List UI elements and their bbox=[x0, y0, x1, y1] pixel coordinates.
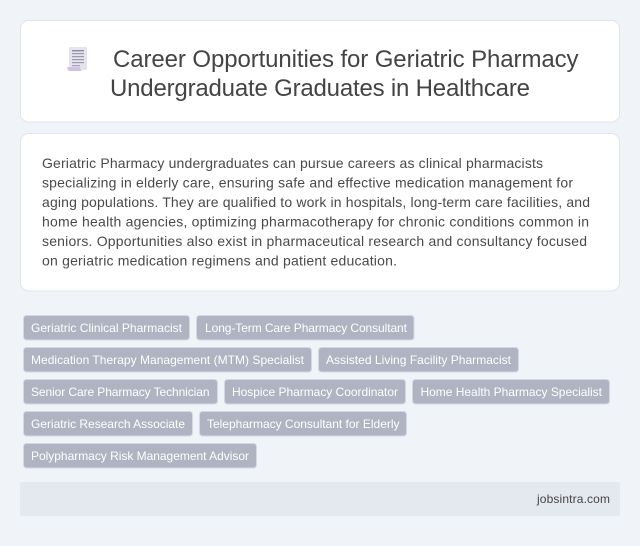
icon: document scroll bbox=[67, 47, 87, 71]
tag: Geriatric Clinical Pharmacist: Geriatric Clinical Pharmacist bbox=[31, 321, 183, 335]
footer source text: jobsintra.com bbox=[536, 492, 610, 506]
tag: Telepharmacy Consultant for Elderly bbox=[200, 412, 406, 436]
tag: Long-Term Care Pharmacy Consultant bbox=[196, 316, 414, 340]
tag: Hospice Pharmacy Coordinator bbox=[224, 380, 406, 404]
panel: description card bbox=[20, 134, 620, 291]
panel: header card bbox=[20, 20, 620, 122]
tag: Medication Therapy Management (MTM) Specialist: Medication Therapy Management (MTM) Specialist bbox=[31, 353, 305, 367]
tag: Telepharmacy Consultant for Elderly: Telepharmacy Consultant for Elderly bbox=[207, 417, 400, 431]
description text bbox=[42, 155, 590, 268]
panel: job role tags bbox=[24, 316, 610, 468]
tag: Home Health Pharmacy Specialist bbox=[412, 380, 610, 404]
description text: home health agencies, optimizing pharmacotherapy for chronic conditions common in bbox=[42, 214, 589, 230]
footer bar bbox=[20, 482, 620, 516]
title bbox=[110, 46, 578, 102]
tag: Geriatric Research Associate: Geriatric Research Associate bbox=[31, 417, 185, 431]
tag: Medication Therapy Management (MTM) Specialist bbox=[24, 348, 312, 372]
description text: Geriatric Pharmacy undergraduates can pursue careers as clinical pharmacists bbox=[42, 155, 543, 171]
tag: Senior Care Pharmacy Technician bbox=[24, 380, 218, 404]
tag: Senior Care Pharmacy Technician: Senior Care Pharmacy Technician bbox=[31, 385, 210, 399]
title: Undergraduate Graduates in Healthcare bbox=[110, 75, 530, 102]
tag: Assisted Living Facility Pharmacist bbox=[318, 348, 518, 372]
title: Career Opportunities for Geriatric Pharmacy bbox=[113, 46, 578, 73]
tag: Geriatric Research Associate bbox=[24, 412, 192, 436]
tag: Geriatric Clinical Pharmacist bbox=[24, 316, 190, 340]
description text: on geriatric medication regimens and patient education. bbox=[42, 252, 397, 268]
tag: Long-Term Care Pharmacy Consultant: Long-Term Care Pharmacy Consultant bbox=[205, 321, 408, 335]
tag: Home Health Pharmacy Specialist: Home Health Pharmacy Specialist bbox=[420, 385, 603, 399]
tag: Assisted Living Facility Pharmacist: Assisted Living Facility Pharmacist bbox=[326, 353, 512, 367]
tag: Polypharmacy Risk Management Advisor: Polypharmacy Risk Management Advisor bbox=[31, 449, 249, 463]
tag: Polypharmacy Risk Management Advisor bbox=[24, 444, 256, 468]
tag: Hospice Pharmacy Coordinator: Hospice Pharmacy Coordinator bbox=[232, 385, 398, 399]
description text: aging populations. They are qualified to work in hospitals, long-term care facilities, and bbox=[42, 194, 590, 210]
description text: seniors. Opportunities also exist in pharmaceutical research and consultancy focused bbox=[42, 233, 587, 249]
description text: specializing in elderly care, ensuring safe and effective medication management for bbox=[42, 174, 573, 190]
